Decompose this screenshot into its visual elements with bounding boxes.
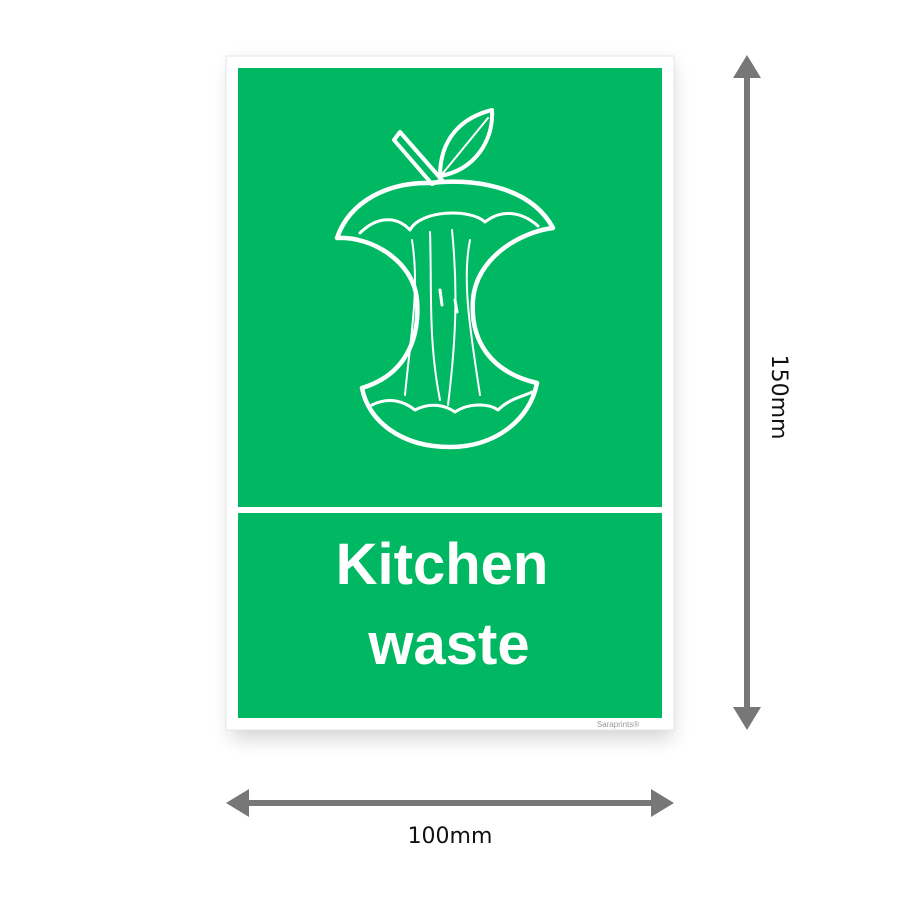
arrow: height xyxy=(733,55,761,730)
sign card xyxy=(226,56,674,738)
label: 100mm: 100mm xyxy=(408,824,492,849)
green top panel xyxy=(238,68,662,507)
label: 150mm: 150mm xyxy=(766,355,791,439)
title text xyxy=(336,532,548,677)
brand mark: Saraprints® xyxy=(597,720,639,729)
arrow: width xyxy=(226,789,674,817)
icon: apple core xyxy=(337,110,553,447)
title text: Kitchen xyxy=(336,532,548,597)
green bottom panel xyxy=(238,513,662,718)
title text: waste xyxy=(367,612,530,677)
